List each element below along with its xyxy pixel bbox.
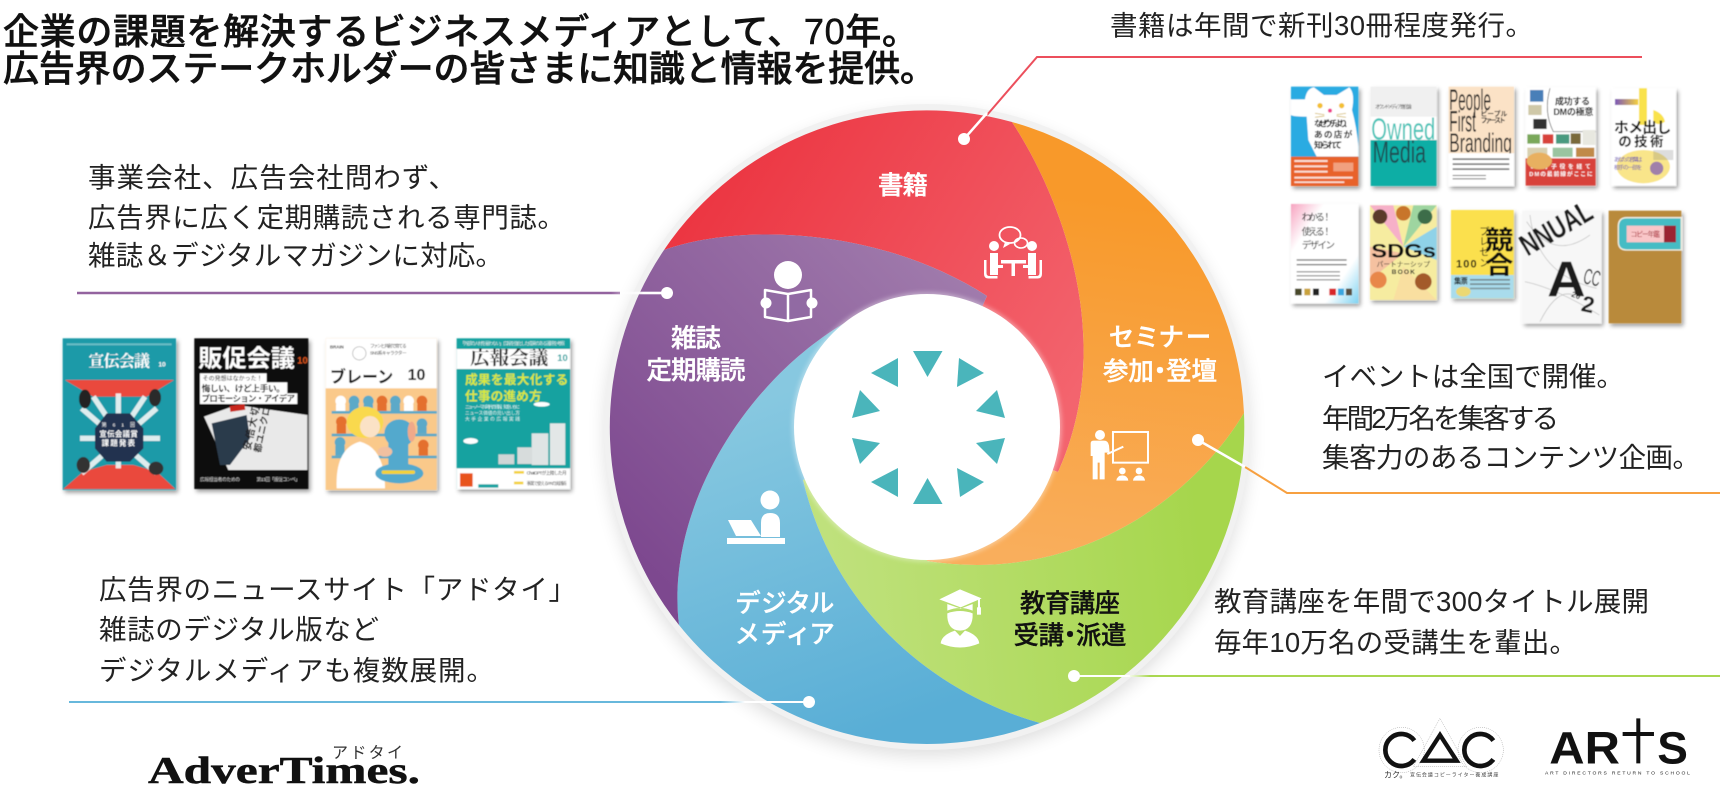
cover: ブレーン: ファンと共創で育てる <box>370 343 407 350</box>
book: cat cover: あの店が <box>1314 128 1353 139</box>
book: cat cover <box>1291 87 1358 186</box>
cover: 販促会議: 安倍大切 <box>240 405 262 451</box>
icon: teacher <box>1091 430 1148 481</box>
logo: CAC <box>1379 718 1503 780</box>
connector: education <box>1068 670 1720 682</box>
label: seminars <box>1103 324 1217 386</box>
icon: laptop user <box>727 490 785 544</box>
book: design: デザイン <box>1302 240 1335 252</box>
wheel rim <box>604 104 1250 750</box>
logo: ARTS: S <box>1657 722 1688 773</box>
text: digital media: デジタルメディアも複数展開。 <box>99 655 494 686</box>
label: digital media: デジタル <box>736 589 834 618</box>
cover: 販促会議: その発想はなかった！ <box>203 374 263 382</box>
text: books: 書籍は年間で新刊30冊程度発行。 <box>1110 10 1533 41</box>
centre circle <box>794 294 1060 560</box>
logo: AdverTimes: アドタイ <box>332 744 403 762</box>
cover: 宣伝会議 <box>63 338 176 490</box>
label: magazines <box>646 325 746 385</box>
cover: 広報会議: 10 <box>557 353 568 363</box>
book: 競合: 合 <box>1485 252 1514 280</box>
text: education <box>1214 586 1649 658</box>
book: SDGs: パートナーシップ <box>1377 261 1430 269</box>
cover: 広報会議: ニューノーマル時代の情報、知をいかに <box>465 403 520 410</box>
book: コピー年鑑: コピー年鑑 <box>1631 230 1660 239</box>
segment: education <box>803 413 1244 723</box>
label: education: 受講・派遣 <box>1014 622 1126 650</box>
book: SDGs <box>1370 205 1437 300</box>
text: seminars: 集客力のあるコンテンツ企画。 <box>1322 442 1700 473</box>
book: Owned Media: Media <box>1373 136 1427 170</box>
cover: 宣伝会議: 第61回 <box>102 422 135 429</box>
text: seminars <box>1322 361 1700 473</box>
book: design: わかる！ <box>1302 213 1332 224</box>
logo: CAC: カク。 <box>1384 771 1407 780</box>
label: magazines: 定期購読 <box>646 357 746 385</box>
book: 競合: ン <box>1479 258 1489 269</box>
text: education: 教育講座を年間で300タイトル展開 <box>1214 586 1649 617</box>
book: ANNUAL ACC: 20 <box>1570 290 1582 301</box>
book: People First Branding: First <box>1449 105 1476 138</box>
segment: seminars <box>927 122 1244 565</box>
title: 企業の課題を解決するビジネスメディアとして、70年。 <box>3 11 918 52</box>
label: digital media: メディア <box>736 620 834 649</box>
title: 広告界のステークホルダーの皆さまに知識と情報を提供。 <box>3 48 936 89</box>
connector: books <box>958 57 1642 145</box>
book: 競合: ゼ <box>1479 247 1489 259</box>
book: 競合: 競 <box>1485 225 1513 255</box>
cover: 販促会議: 第13回「販促コンペ」 <box>257 476 300 483</box>
segment: magazines <box>610 234 987 625</box>
segment: books <box>664 110 1084 472</box>
book: ホメ出し: 相手の一部を <box>1614 163 1642 171</box>
text: education: 毎年10万名の受講生を輩出。 <box>1214 627 1577 658</box>
book covers right <box>1451 87 1681 323</box>
book: People First Branding: Branding <box>1449 128 1512 158</box>
book: 競合: レ <box>1479 237 1489 248</box>
cover: 販促会議: 10 <box>297 355 308 365</box>
cover: 広報会議: ニュース価値の見い出し方 <box>465 409 520 416</box>
centre triangles <box>852 351 1005 504</box>
book: ANNUAL ACC: A <box>1547 252 1586 308</box>
book: Owned Media <box>1371 87 1437 186</box>
cover: ブレーン: SNS系キャラクター <box>370 349 407 356</box>
cover: 販促会議: プロモーション・アイデア <box>202 393 295 403</box>
connector: magazines <box>77 287 673 299</box>
icon: graduate <box>939 589 982 647</box>
book: Owned Media: オウンドメディア進化論 <box>1375 103 1412 110</box>
label: magazines: 雑誌 <box>671 325 721 353</box>
label: education <box>1014 590 1126 650</box>
diagram: spiral wheel <box>604 104 1250 756</box>
book: cat cover: なぜウチより、 <box>1314 119 1352 129</box>
title <box>3 11 936 89</box>
segment: digital media <box>677 321 1040 744</box>
book: ホメ出し: の技術 <box>1618 133 1663 149</box>
book: DM: DMの極意 <box>1553 106 1593 117</box>
connector: digital media <box>69 696 815 708</box>
logo: ARTS <box>1545 718 1690 776</box>
book: 競合: プ <box>1479 226 1489 238</box>
connector: seminars <box>1192 434 1720 493</box>
book: design <box>1291 204 1358 303</box>
book: SDGs: SDGs <box>1371 241 1436 262</box>
cover: 宣伝会議: 宣伝会議 <box>88 352 150 371</box>
book: 競合 <box>1451 210 1514 298</box>
label: seminars: セミナー <box>1109 324 1211 352</box>
text: magazines <box>88 162 565 271</box>
cover: ブレーン: BRAIN <box>330 344 344 349</box>
cover: 広報会議: 事業で使えるPRの実践術 <box>527 480 567 487</box>
label: seminars: 参加・登壇 <box>1103 358 1217 386</box>
logo: ARTS: ART DIRECTORS RETURN TO SCHOOL <box>1545 770 1690 776</box>
book: 競合: 集票 <box>1454 276 1468 285</box>
book: People First Branding: ファースト <box>1481 117 1506 125</box>
book covers <box>1291 84 1514 303</box>
book: People First Branding <box>1449 84 1514 186</box>
cover: 宣伝会議: 10 <box>158 362 166 369</box>
book: cat cover: 知られて <box>1314 139 1342 150</box>
text: digital media: 広告界のニュースサイト「アドタイ」 <box>99 574 576 605</box>
cover: 広報会議: 仕事の進め方 <box>465 388 542 403</box>
logo: AdverTimes: AdverTimes. <box>148 750 420 792</box>
logo: ARTS: AR <box>1549 722 1620 773</box>
cover: ブレーン <box>326 338 437 490</box>
cover: ブレーン: 10 <box>408 367 426 384</box>
cover: 広報会議: 大手企業の広報実践 <box>465 415 520 422</box>
cover: 広報会議: ChatGPTが上陸した月 <box>527 469 567 476</box>
book: People First Branding: People <box>1449 84 1491 117</box>
cover: 宣伝会議: 課題発表 <box>102 439 136 448</box>
text: seminars: イベントは全国で開催。 <box>1322 361 1624 392</box>
magazine covers continued <box>326 338 570 490</box>
magazine covers <box>63 338 308 490</box>
book: ホメ出し <box>1612 88 1676 186</box>
cover: 宣伝会議: 宣伝会議賞 <box>99 430 138 439</box>
cover: 広報会議: 「外部の人材を雇わない」広報を強化した成果のある議題を考察 <box>460 340 565 347</box>
label: digital media <box>736 589 834 649</box>
book: design: 使える！ <box>1302 226 1332 238</box>
book: ホメ出し: あなたの言葉は <box>1614 156 1643 164</box>
book: ANNUAL ACC: 2 <box>1579 290 1597 318</box>
book: DM: DMの最前線がここに <box>1529 170 1593 178</box>
cover: 広報会議 <box>457 338 570 489</box>
text: magazines: 事業会社、広告会社問わず、 <box>88 162 456 193</box>
text: magazines: 雑誌＆デジタルマガジンに対応。 <box>88 240 503 271</box>
icon: reader <box>760 261 818 321</box>
book: ANNUAL ACC: CC <box>1581 264 1603 292</box>
book: DM <box>1526 87 1596 186</box>
cover: 販促会議 <box>194 338 308 489</box>
book: コピー年鑑 <box>1609 211 1681 323</box>
book: DM: 30分子役を経て <box>1531 162 1591 170</box>
book: Owned Media: Owned <box>1371 112 1435 146</box>
cover: 広報会議: 成果を最大化する <box>465 372 568 387</box>
book: ANNUAL ACC: NNUAL <box>1514 195 1599 263</box>
cover: 販促会議: 都ユニクロ <box>252 406 272 454</box>
logo: AdverTimes <box>148 744 420 792</box>
cover: 販促会議: 販促会議 <box>198 346 295 373</box>
text: digital media <box>99 574 576 686</box>
cover: ブレーン: ブレーン <box>330 366 393 386</box>
cover: 広報会議: 広報会議 <box>470 347 549 369</box>
text: digital media: 雑誌のデジタル版など <box>99 614 379 645</box>
book: 競合: 100 <box>1456 258 1477 270</box>
text: magazines: 広告界に広く定期購読される専門誌。 <box>88 202 565 233</box>
logo: CAC: 宣伝会議コピーライター養成講座 <box>1410 772 1498 779</box>
centre glow <box>792 292 1062 562</box>
wheel shadow <box>605 112 1249 756</box>
book: DM: 成功する <box>1555 95 1590 106</box>
book: SDGs: BOOK <box>1392 269 1415 276</box>
text: seminars: 年間2万名を集客する <box>1322 403 1559 434</box>
book: People First Branding: ピープル <box>1481 110 1508 118</box>
cover: 販促会議: 悔しい、けど上手い。 <box>202 382 285 393</box>
label: education: 教育講座 <box>1020 590 1120 618</box>
cover: 販促会議: 広報担当者のための <box>200 476 240 483</box>
icon: meeting <box>984 227 1042 278</box>
book: ANNUAL ACC <box>1514 195 1603 323</box>
book: ホメ出し: ホメ出し <box>1614 119 1671 136</box>
label: books: 書籍 <box>878 172 928 200</box>
